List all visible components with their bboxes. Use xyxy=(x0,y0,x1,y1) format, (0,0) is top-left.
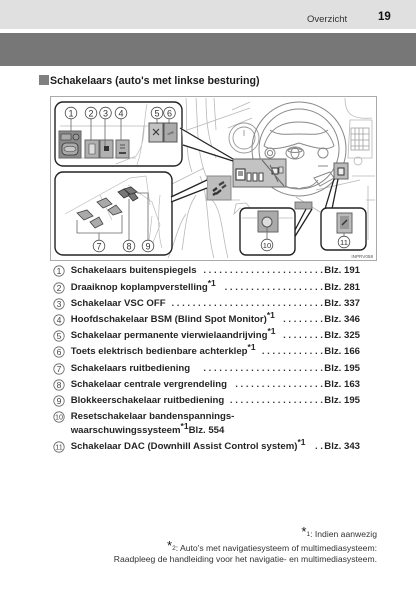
callout: switch 10 xyxy=(240,208,295,255)
item 3: Blz. 337 xyxy=(324,298,360,309)
figure code: INPRV058 xyxy=(351,254,373,259)
item 7: 7 xyxy=(57,364,62,374)
number circles xyxy=(65,107,175,119)
item 2: ................... xyxy=(225,282,326,293)
switch 2 xyxy=(85,140,99,158)
item 6 xyxy=(53,342,360,358)
item 7: Blz. 195 xyxy=(324,363,360,374)
item 8: Schakelaar centrale vergrendeling xyxy=(71,379,227,390)
switch 3 xyxy=(100,140,113,158)
item 4: Blz. 346 xyxy=(324,314,360,325)
item 2 xyxy=(53,278,360,294)
item 3 xyxy=(53,298,360,310)
footnote 2 xyxy=(114,538,377,564)
heading marker square xyxy=(39,75,49,85)
switch 4 xyxy=(116,140,129,158)
callout: switches 1 to 6: 3 xyxy=(103,108,108,118)
section name: Overzicht xyxy=(307,14,347,25)
switch 1 xyxy=(59,131,81,158)
item 2: Draaiknop koplampverstelling*1 xyxy=(71,278,216,293)
item 5: ........ xyxy=(283,330,326,341)
highlight: tyre reset location xyxy=(295,202,312,209)
item 5: Schakelaar permanente vierwielaandrijving*1 xyxy=(71,326,276,341)
item 4: Hoofdschakelaar BSM (Blind Spot Monitor)*1 xyxy=(71,310,275,325)
switch 6 xyxy=(164,123,177,142)
callout: switches 1 to 6: 2 xyxy=(88,108,94,118)
callout pointers xyxy=(171,128,338,238)
callout: switches 1 to 6: 4 xyxy=(118,108,124,118)
item 10: waarschuwingssysteem*1Blz. 554 xyxy=(71,421,224,436)
item 3: 3 xyxy=(57,299,62,309)
callout: switch 10: 10 xyxy=(263,241,271,250)
page number: 19 xyxy=(378,11,391,23)
heading: Schakelaars (auto's met linkse besturing) xyxy=(50,75,260,87)
item 8: Blz. 163 xyxy=(324,379,360,390)
item 6: Toets elektrisch bedienbare achterklep*1 xyxy=(71,342,256,357)
item 10 xyxy=(53,411,234,436)
item 9: .................. xyxy=(230,395,326,406)
leader lines xyxy=(71,119,169,146)
item 10: 10 xyxy=(55,413,63,422)
item 8: 8 xyxy=(57,380,62,390)
item 7: ....................... xyxy=(203,363,326,374)
item 9 xyxy=(53,395,360,407)
dashboard line art xyxy=(168,98,375,258)
item 2: 2 xyxy=(57,283,62,293)
steering wheel xyxy=(252,102,346,196)
highlight: DAC switch xyxy=(334,163,348,179)
footnote 2: Raadpleeg de handleiding voor het navigatie- en multimediasysteem. xyxy=(114,554,377,564)
top header band xyxy=(0,0,416,29)
item 6: Blz. 166 xyxy=(324,346,360,357)
item 5: Blz. 325 xyxy=(324,330,360,341)
item 8 xyxy=(53,379,360,391)
leader lines xyxy=(77,193,148,240)
callout: switches 1 to 6: 6 xyxy=(167,108,172,118)
item 1 xyxy=(53,265,360,277)
callout: switches 7 to 9 xyxy=(55,172,172,255)
callout: switches 1 to 6 xyxy=(55,102,182,166)
callout: switches 7 to 9: 9 xyxy=(145,242,151,252)
diagram: car dashboard switches xyxy=(50,96,377,261)
item 5: 5 xyxy=(57,331,62,341)
item 11: Blz. 343 xyxy=(324,441,360,452)
item 1: Blz. 191 xyxy=(324,265,360,276)
item 3: Schakelaar VSC OFF xyxy=(71,298,166,309)
toyota emblem xyxy=(286,147,304,159)
item 4 xyxy=(53,310,360,326)
item 1: Schakelaars buitenspiegels xyxy=(71,265,197,276)
callout: switches 7 to 9: 7 xyxy=(96,242,102,252)
item 3: ............................. xyxy=(171,298,326,309)
item 11: .. xyxy=(315,441,326,452)
footnote 1: *1: Indien aanwezig xyxy=(301,524,377,539)
item 9: Blokkeerschakelaar ruitbediening xyxy=(71,395,224,406)
instrument dial xyxy=(229,123,259,153)
item 5 xyxy=(53,326,360,342)
item 9: 9 xyxy=(57,396,62,406)
item 2: Blz. 281 xyxy=(324,282,360,293)
footnote 2: *2: Auto's met navigatiesysteem of multimediasysteem: xyxy=(167,538,377,553)
footnotes xyxy=(114,524,377,564)
item 7: Schakelaars ruitbediening xyxy=(71,363,190,374)
callout: switch 11: 11 xyxy=(340,238,348,247)
item 1: ....................... xyxy=(203,265,326,276)
switch list xyxy=(53,265,360,453)
dark grey band xyxy=(0,33,416,66)
number circles xyxy=(93,240,154,252)
item 11: 11 xyxy=(55,443,63,452)
item 10: Resetschakelaar bandenspannings- xyxy=(71,411,234,422)
highlight: door switch group xyxy=(207,176,231,200)
window switches xyxy=(77,198,122,228)
switch 5 xyxy=(149,123,163,142)
callout: switch 11 xyxy=(321,208,366,250)
item 4: 4 xyxy=(57,315,62,325)
callout: switches 1 to 6: 5 xyxy=(154,108,160,118)
item 7 xyxy=(53,363,360,375)
item 6: ............ xyxy=(262,346,326,357)
callout: switches 7 to 9: 8 xyxy=(126,242,132,252)
item 1: 1 xyxy=(57,266,62,276)
item 11: Schakelaar DAC (Downhill Assist Control system)*1 xyxy=(71,437,306,452)
item 9: Blz. 195 xyxy=(324,395,360,406)
item 6: 6 xyxy=(57,347,62,357)
item 8: ................. xyxy=(235,379,326,390)
highlight: centre switch group xyxy=(233,159,286,187)
item 4: ........ xyxy=(283,314,326,325)
callout: switches 1 to 6: 1 xyxy=(68,108,74,118)
